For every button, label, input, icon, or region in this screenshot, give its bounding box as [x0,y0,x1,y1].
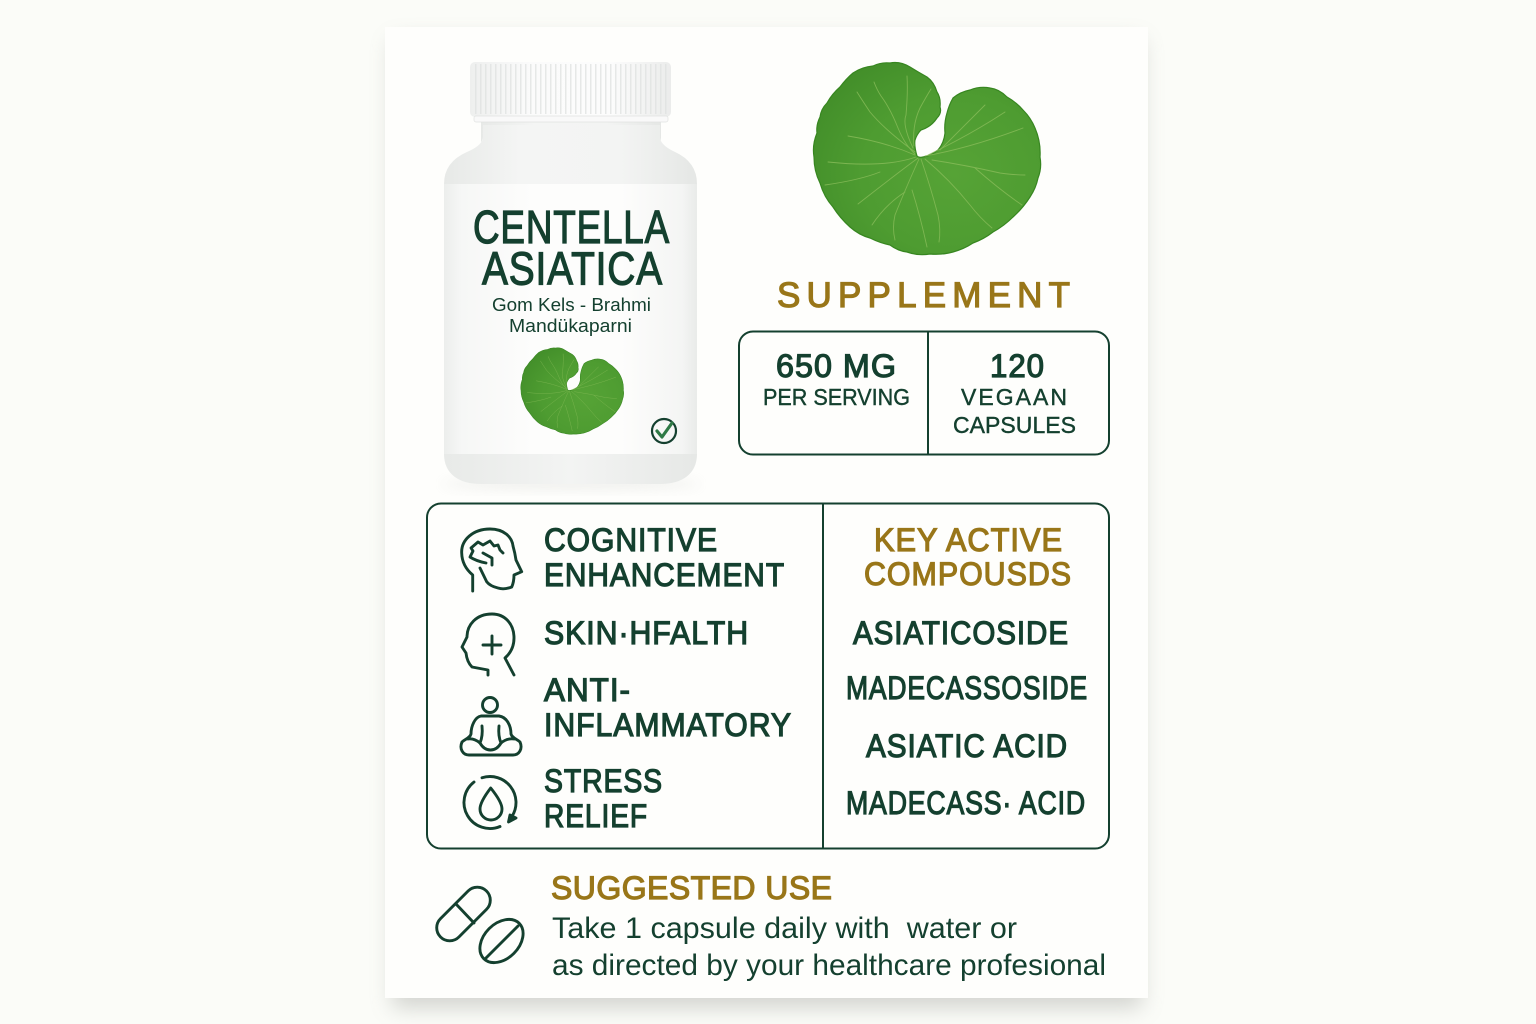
compound list [846,615,1088,821]
label leaf [521,348,624,434]
compound list: ASIATIC ACID [866,728,1068,764]
heading: suggested use: SUGGESTED USE [551,870,833,906]
compound list: MADECASSOSIDE [846,670,1088,706]
heading: key active compounds [864,522,1072,592]
benefit: cognitive enhancement: ENHANCEMENT [544,557,785,593]
product name: ASIATICA [482,242,663,294]
benefit: anti-inflammatory [544,672,792,743]
benefit: anti-inflammatory: INFLAMMATORY [544,707,792,743]
product name [473,201,670,294]
supplement bottle [441,62,701,488]
icon: capsule and tablet [431,882,532,971]
icon: head with plus [462,614,514,675]
dose label: PER SERVING [763,384,910,410]
alternate names: Mandükaparni [509,315,632,336]
capsule count: 120 [990,348,1045,384]
suggested use text: Take 1 capsule daily with water or [552,912,1017,945]
suggested use text: as directed by your healthcare profesional [552,949,1106,982]
bottle shoulder shade [444,125,697,184]
panel: benefits and compounds [427,503,1109,849]
heading: key active compounds: COMPOUSDS [864,556,1072,592]
benefit: cognitive enhancement [544,522,785,593]
benefit: cognitive enhancement: COGNITIVE [544,522,718,558]
bottle neck [481,118,661,150]
benefit: skin health: SKIN·HFALTH [544,615,749,651]
benefit: anti-inflammatory: ANTI- [544,672,631,708]
bottle base shade [444,454,697,484]
bottle body [444,138,697,484]
icon: brain in head [462,529,522,591]
benefit: stress relief: STRESS [544,763,663,799]
bottle cap [470,62,671,122]
bottle label [444,184,697,454]
heading: supplement: SUPPLEMENT [777,276,1071,315]
capsule label [953,384,1076,438]
benefit: stress relief: RELIEF [544,798,648,834]
compound list: ASIATICOSIDE [853,615,1069,651]
heading: key active compounds: KEY ACTIVE [874,522,1063,558]
product name: CENTELLA [473,201,670,253]
alternate names: Gom Kels - Brahmi [492,294,651,315]
check badge [652,419,676,443]
dose amount: 650 MG [776,348,897,384]
panel: poster card [385,27,1148,1008]
benefit: stress relief [544,763,663,834]
alternate names [492,294,651,336]
capsule label: CAPSULES [953,412,1076,438]
suggested use text [552,912,1106,982]
panel: dosage box [739,331,1109,455]
icon: meditation figure [461,698,521,755]
compound list: MADECASS· ACID [846,785,1086,821]
capsule label: VEGAAN [961,384,1067,410]
icon: water drop cycle [464,777,516,829]
large centella leaf [813,62,1041,255]
